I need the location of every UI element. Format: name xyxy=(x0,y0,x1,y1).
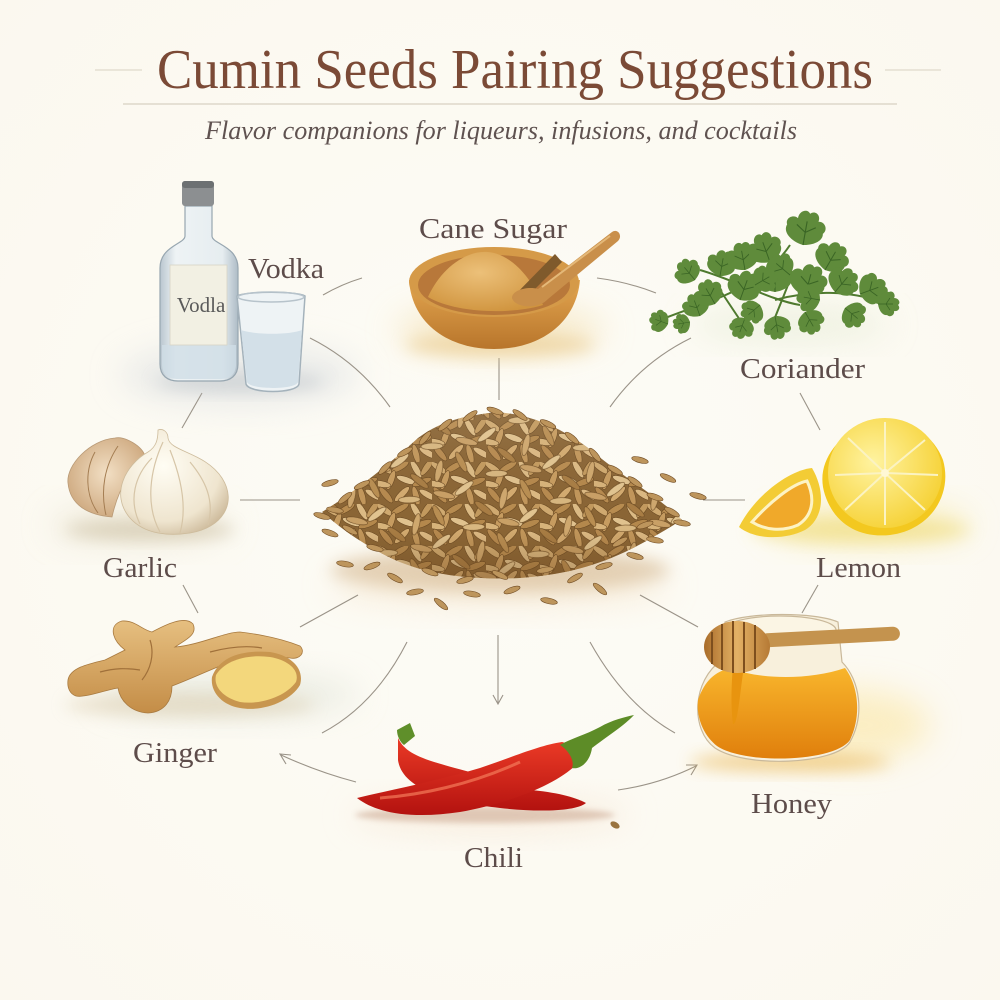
label: Ginger: Ginger xyxy=(133,737,217,769)
label: Honey: Honey xyxy=(751,788,833,820)
label: Vodka: Vodka xyxy=(248,253,324,285)
edge and scattered seeds xyxy=(313,405,707,612)
icon: garlic xyxy=(65,429,235,540)
subtitle: Flavor companions for liqueurs, infusions, and cocktails xyxy=(204,116,797,145)
icon: bowl of cane sugar with spoon xyxy=(405,231,620,357)
label: Cane Sugar: Cane Sugar xyxy=(419,213,567,245)
cumin seed pile xyxy=(313,405,707,612)
label: Garlic: Garlic xyxy=(103,552,177,584)
icon: lemon xyxy=(739,418,970,542)
icon: honey jar with dipper xyxy=(690,614,900,772)
icon: vodka bottle and glass: Vodla xyxy=(177,293,226,317)
connector lines and arrows xyxy=(182,278,820,790)
title: Cumin Seeds Pairing Suggestions xyxy=(157,39,873,101)
label: Lemon: Lemon xyxy=(816,552,902,584)
label: Coriander: Coriander xyxy=(740,353,865,385)
watercolor washes xyxy=(50,304,970,833)
icon: vodka bottle and glass xyxy=(155,181,325,392)
icon: red chili peppers xyxy=(355,715,634,830)
icon: coriander sprigs xyxy=(646,208,899,342)
label: Chili: Chili xyxy=(464,842,523,874)
icon: ginger root xyxy=(65,620,315,717)
